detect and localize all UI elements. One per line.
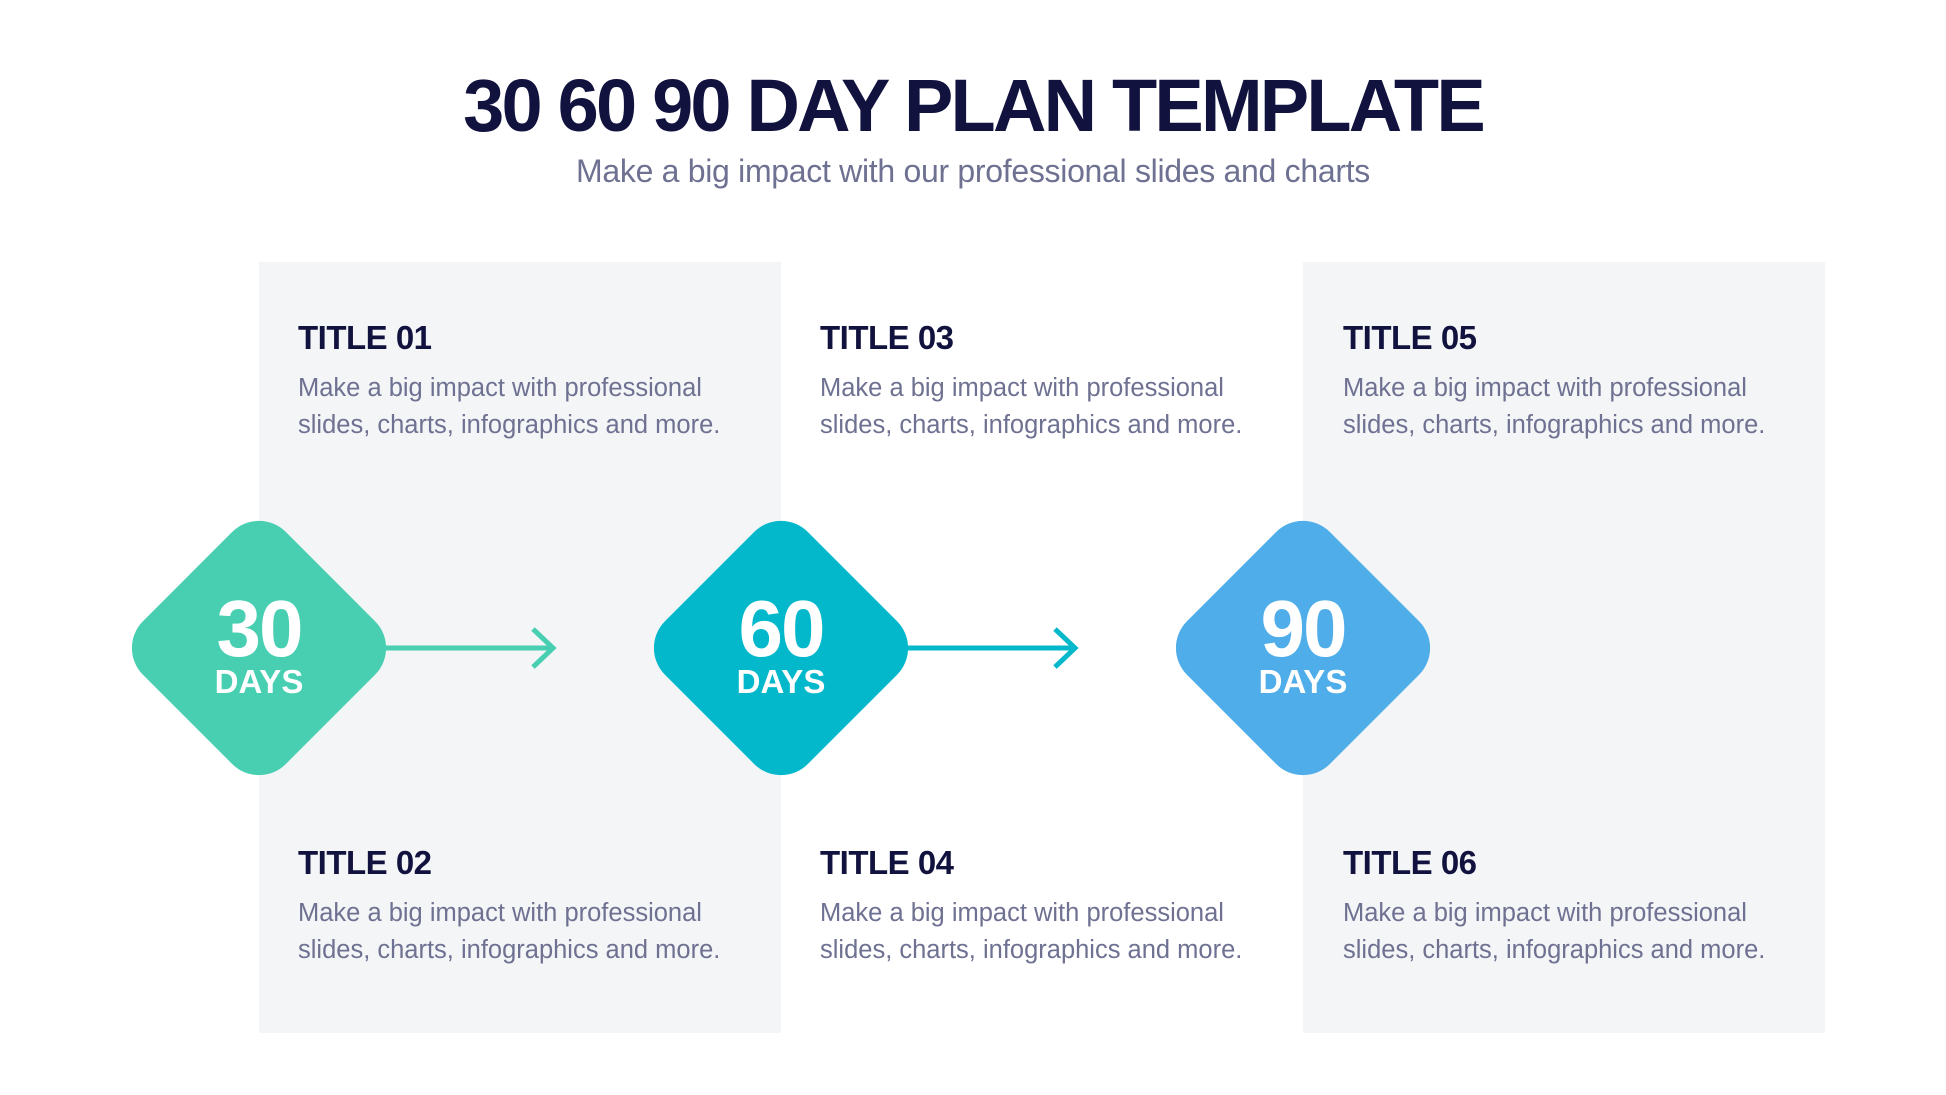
- text: body 01: [298, 374, 720, 439]
- text: title 01: TITLE 01: [298, 319, 432, 356]
- arrow: 30 to 60: [386, 627, 556, 669]
- text: title 06: TITLE 06: [1343, 844, 1477, 881]
- text: title 02: TITLE 02: [298, 844, 432, 881]
- text: body 04: [820, 899, 1242, 964]
- panel: column 1 background: [259, 262, 781, 1033]
- text: body 02: slides, charts, infographics and more.: [298, 936, 720, 964]
- icon: 60 days diamond: 60: [738, 584, 823, 673]
- icon: 60 days diamond: DAYS: [737, 663, 825, 700]
- text: body 06: Make a big impact with professional: [1343, 899, 1747, 927]
- text: body 02: [298, 899, 720, 964]
- icon: 30 days diamond: 30: [216, 584, 301, 673]
- text: body 01: slides, charts, infographics and more.: [298, 411, 720, 439]
- icon: 90 days diamond: [1176, 520, 1430, 776]
- text: body 05: [1343, 374, 1765, 439]
- arrow: 60 to 90: [908, 627, 1078, 669]
- text: body 03: [820, 374, 1242, 439]
- icon: 30 days diamond: DAYS: [215, 663, 303, 700]
- title: 30 60 90 DAY PLAN TEMPLATE: [463, 64, 1483, 147]
- text: title 05: TITLE 05: [1343, 319, 1477, 356]
- panel: column 3 background: [1303, 262, 1825, 1033]
- text: body 03: slides, charts, infographics and more.: [820, 411, 1242, 439]
- text: title 03: TITLE 03: [820, 319, 954, 356]
- text: body 06: [1343, 899, 1765, 964]
- text: body 03: Make a big impact with professional: [820, 374, 1224, 402]
- text: body 05: Make a big impact with professional: [1343, 374, 1747, 402]
- text: title 04: TITLE 04: [820, 844, 954, 881]
- icon: 90 days diamond: 90: [1260, 584, 1345, 673]
- text: body 02: Make a big impact with professional: [298, 899, 702, 927]
- subtitle: Make a big impact with our professional slides and charts: [576, 153, 1370, 189]
- icon: 30 days diamond: [132, 520, 386, 776]
- text: body 06: slides, charts, infographics and more.: [1343, 936, 1765, 964]
- text: body 05: slides, charts, infographics and more.: [1343, 411, 1765, 439]
- icon: 90 days diamond: DAYS: [1259, 663, 1347, 700]
- icon: 60 days diamond: [654, 520, 908, 776]
- text: body 04: Make a big impact with professional: [820, 899, 1224, 927]
- text: body 04: slides, charts, infographics and more.: [820, 936, 1242, 964]
- text: body 01: Make a big impact with professional: [298, 374, 702, 402]
